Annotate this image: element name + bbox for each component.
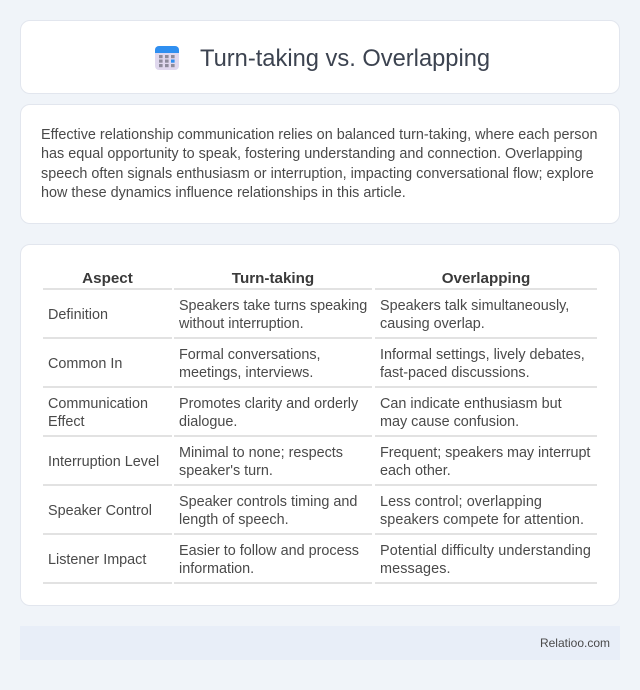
Definition: overlapping [380, 298, 569, 332]
Interruption Level: overlapping: Frequent; speakers may interrupt [380, 445, 590, 461]
intro text: how these dynamics influence relationships in this article. [41, 185, 406, 201]
row: Communication Effect: Effect [48, 414, 85, 430]
row: Definition: Definition [48, 307, 108, 323]
Common In: turn-taking: meetings, interviews. [179, 365, 313, 381]
Common In: overlapping [380, 347, 585, 381]
Listener Impact: overlapping: Potential difficulty understanding [380, 543, 591, 559]
Common In: turn-taking [179, 347, 321, 381]
Interruption Level: turn-taking: Minimal to none; respects [179, 445, 343, 461]
Definition: overlapping: Speakers talk simultaneously, [380, 298, 569, 314]
intro text [41, 127, 598, 201]
row: Interruption Level: Interruption Level [48, 454, 159, 470]
Common In: overlapping: Informal settings, lively debates, [380, 347, 585, 363]
column heading: Overlapping: Overlapping [442, 270, 530, 287]
Communication Effect: turn-taking: dialogue. [179, 414, 237, 430]
Listener Impact: turn-taking [179, 543, 359, 577]
Speaker Control: turn-taking [179, 494, 357, 528]
row: Listener Impact: Listener Impact [48, 552, 146, 568]
Definition: turn-taking [179, 298, 367, 332]
Speaker Control: turn-taking: length of speech. [179, 512, 289, 528]
Communication Effect: overlapping [380, 396, 562, 430]
Listener Impact: overlapping [380, 543, 591, 577]
Listener Impact: turn-taking: Easier to follow and process [179, 543, 359, 559]
Speaker Control: overlapping: speakers compete for attention. [380, 512, 584, 528]
Listener Impact: overlapping: messages. [380, 561, 451, 577]
Communication Effect: overlapping: may cause confusion. [380, 414, 519, 430]
column heading: Aspect: Aspect [82, 270, 133, 287]
Definition: turn-taking: Speakers take turns speaking [179, 298, 367, 314]
Communication Effect: turn-taking [179, 396, 358, 430]
intro text: Effective relationship communication relies on balanced turn-taking, where each person [41, 127, 598, 143]
Communication Effect: turn-taking: Promotes clarity and orderly [179, 396, 358, 412]
panel: intro card [20, 104, 620, 224]
panel: title card [20, 20, 620, 94]
intro text: speech often signals enthusiasm or interruption, impacting conversational flow; explore [41, 166, 594, 182]
intro text: has equal opportunity to speak, fostering understanding and connection. Overlapping [41, 146, 583, 162]
Listener Impact: turn-taking: information. [179, 561, 254, 577]
footer text: Relatioo.com [540, 636, 610, 650]
Speaker Control: overlapping [380, 494, 584, 528]
row: Communication Effect: Communication [48, 396, 148, 412]
Interruption Level: overlapping: each other. [380, 463, 451, 479]
Speaker Control: overlapping: Less control; overlapping [380, 494, 542, 510]
Common In: turn-taking: Formal conversations, [179, 347, 321, 363]
Definition: overlapping: causing overlap. [380, 316, 485, 332]
row: Communication Effect [48, 396, 148, 430]
icon: calendar [155, 46, 179, 70]
Definition: turn-taking: without interruption. [179, 316, 304, 332]
row: Common In: Common In [48, 356, 122, 372]
Interruption Level: turn-taking: speaker's turn. [179, 463, 273, 479]
Speaker Control: turn-taking: Speaker controls timing and [179, 494, 357, 510]
title: Turn-taking vs. Overlapping [200, 46, 490, 72]
Common In: overlapping: fast-paced discussions. [380, 365, 530, 381]
row: Speaker Control: Speaker Control [48, 503, 152, 519]
Interruption Level: overlapping [380, 445, 590, 479]
Interruption Level: turn-taking [179, 445, 343, 479]
footer bar [20, 626, 620, 660]
column heading: Turn-taking: Turn-taking [232, 270, 314, 287]
panel: table card [20, 244, 620, 606]
Communication Effect: overlapping: Can indicate enthusiasm but [380, 396, 562, 412]
